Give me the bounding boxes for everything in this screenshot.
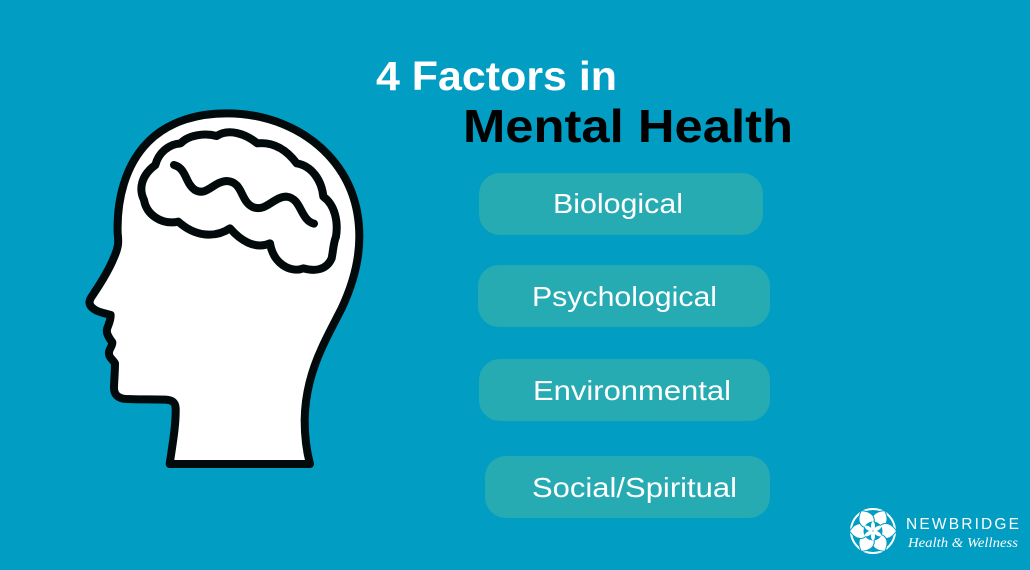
factor: Biological: Biological [553, 188, 683, 219]
brain outline [141, 132, 337, 270]
title [376, 53, 793, 152]
head silhouette [90, 113, 359, 464]
factor: Psychological [478, 265, 770, 327]
logo: Newbridge Health & Wellness [850, 507, 1019, 555]
factor: Social/Spiritual [485, 456, 770, 518]
brain fold [174, 165, 314, 224]
logo wordmark: NEWBRIDGE [906, 516, 1019, 533]
icon: head with brain [90, 113, 359, 464]
factor: Social/Spiritual: Social/Spiritual [532, 472, 737, 503]
factor: Psychological: Psychological [532, 281, 717, 312]
logo tagline: Health & Wellness [907, 535, 1018, 550]
factor: Environmental [479, 359, 770, 421]
factor: Environmental: Environmental [533, 375, 731, 406]
icon: flower emblem [850, 507, 896, 555]
title line: Mental Health: Mental Health [463, 100, 793, 152]
factor: Biological [479, 173, 763, 235]
title line: 4 Factors in: 4 Factors in [376, 53, 617, 99]
